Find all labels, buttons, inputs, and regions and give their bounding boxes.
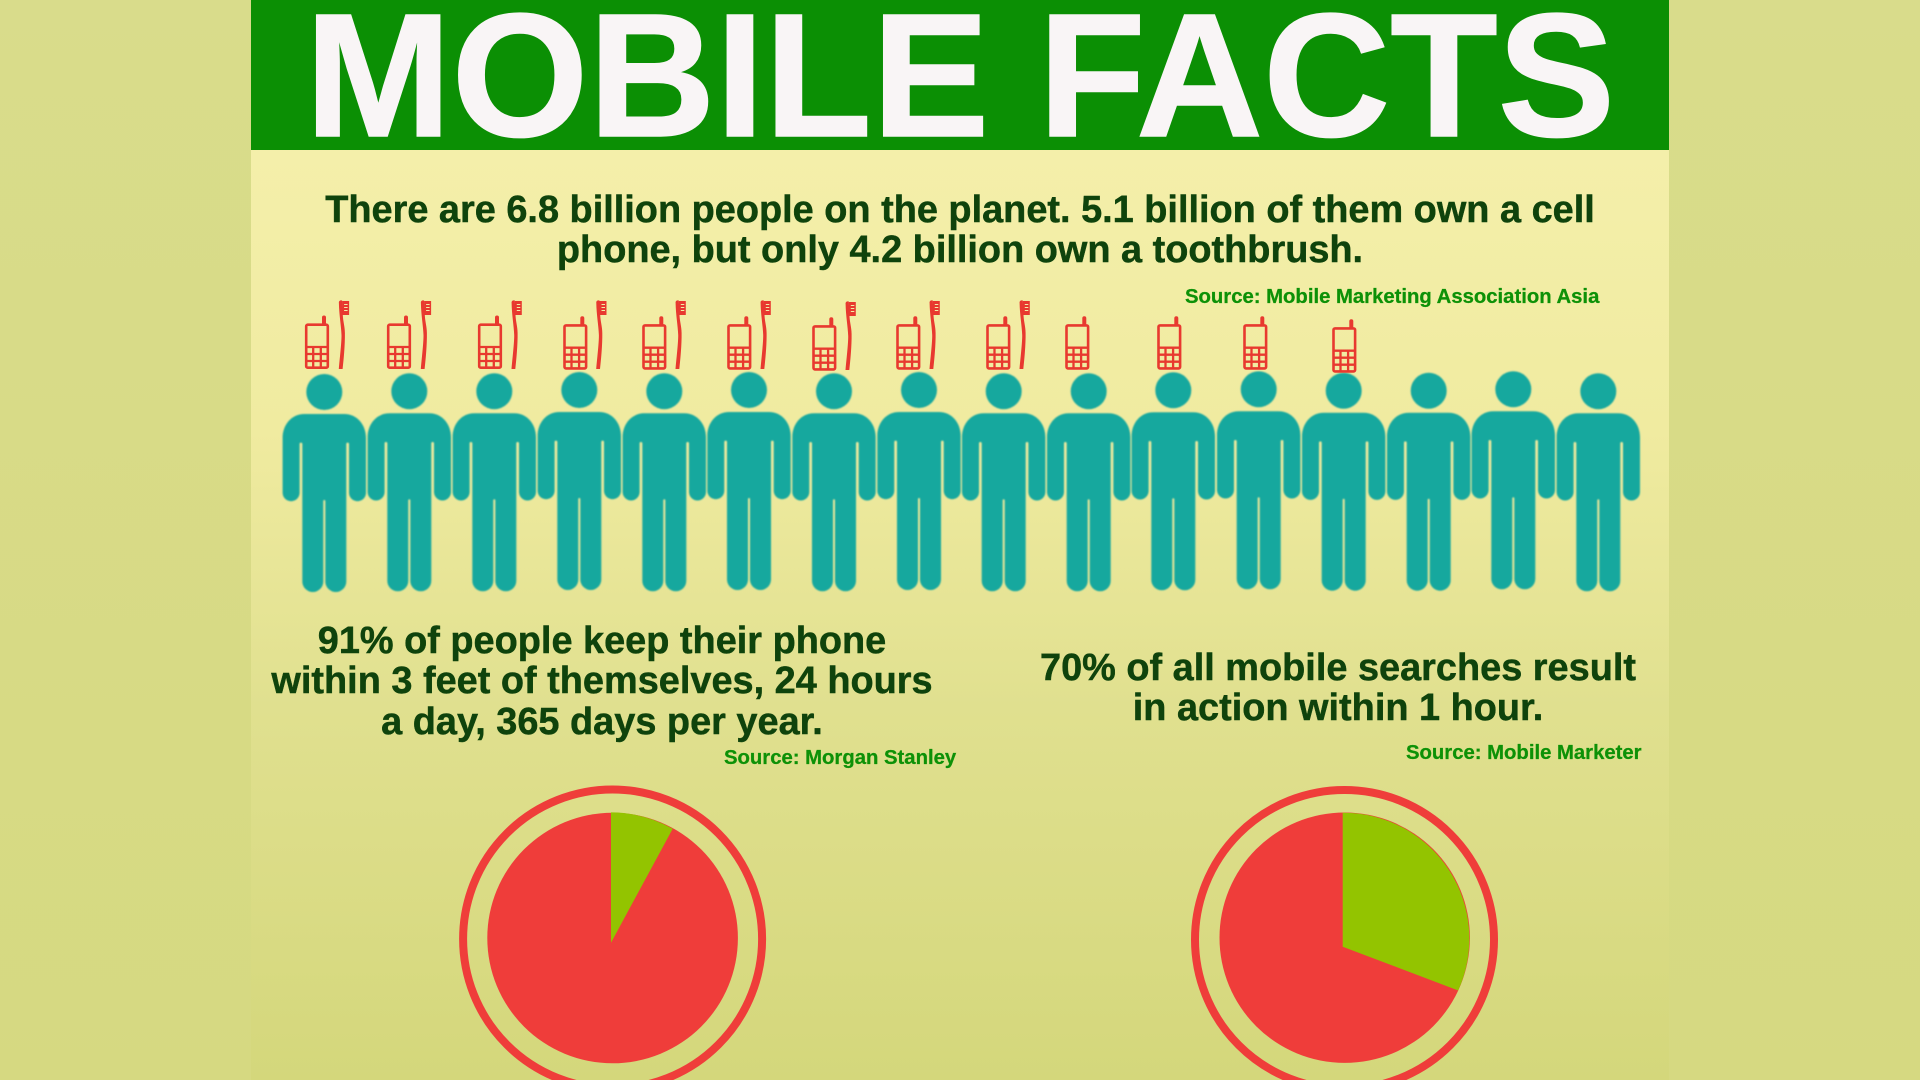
toothbrush 9	[1020, 300, 1030, 369]
phone 7	[813, 319, 835, 369]
person 1	[283, 374, 366, 592]
right fact text: in action within 1 hour.	[1133, 687, 1543, 729]
phone 1	[306, 318, 328, 368]
phone 2	[388, 318, 410, 368]
source: Mobile Marketer: Source: Mobile Marketer	[1406, 742, 1642, 764]
phone 4	[564, 318, 586, 368]
toothbrush 6	[760, 300, 771, 369]
left ring	[463, 790, 762, 1080]
person 16	[1557, 373, 1640, 591]
pictogram: toothbrushes	[339, 300, 1030, 370]
right ring	[1195, 790, 1494, 1080]
toothbrush 5	[676, 300, 686, 369]
title banner	[251, 0, 1669, 174]
phone 11	[1158, 318, 1180, 368]
left pie chart	[463, 790, 762, 1080]
person 12	[1217, 371, 1300, 589]
left fact text: within 3 feet of themselves, 24 hours	[270, 660, 933, 702]
person 9	[962, 373, 1045, 591]
central panel	[251, 150, 1669, 1080]
right pie red slice	[1220, 812, 1470, 1063]
toothbrush 1	[339, 300, 349, 369]
pictogram: cell phones	[306, 318, 1355, 371]
phone 9	[987, 318, 1009, 368]
right pie chart	[1195, 790, 1494, 1080]
person 8	[877, 372, 961, 590]
source: Morgan Stanley: Source: Morgan Stanley	[724, 747, 957, 769]
toothbrush 4	[596, 300, 606, 369]
person 3	[453, 373, 536, 591]
person 14	[1387, 373, 1470, 591]
toothbrush 3	[512, 300, 522, 369]
left fact text: a day, 365 days per year.	[381, 701, 823, 743]
toothbrush 2	[421, 300, 431, 369]
person 10	[1047, 373, 1130, 591]
toothbrush 7	[846, 301, 856, 370]
right fact text: 70% of all mobile searches result	[1040, 647, 1636, 689]
person 15	[1472, 371, 1555, 589]
person 5	[623, 373, 706, 591]
person 6	[707, 372, 791, 590]
left fact text: 91% of people keep their phone	[318, 620, 886, 662]
person 2	[368, 373, 451, 591]
person 4	[538, 372, 621, 590]
phone 8	[897, 318, 919, 368]
intro statement: There are 6.8 billion people on the planet. 5.1 billion of them own a cell	[325, 189, 1595, 231]
left pie red slice	[487, 813, 738, 1063]
right pie green slice	[1343, 813, 1469, 990]
source: Mobile Marketing Association Asia: Source: Mobile Marketing Association Asia	[1185, 286, 1600, 308]
left pie green slice	[611, 812, 673, 943]
phone 6	[728, 318, 750, 368]
phone 12	[1244, 318, 1266, 368]
phone 3	[479, 318, 501, 368]
toothbrush 8	[930, 300, 940, 369]
person 13	[1302, 373, 1385, 591]
person 11	[1132, 372, 1215, 590]
intro statement: phone, but only 4.2 billion own a toothbrush.	[557, 229, 1363, 271]
person 7	[792, 373, 876, 591]
phone 10	[1066, 318, 1088, 368]
pictogram: people row	[283, 371, 1640, 592]
phone 13	[1333, 321, 1355, 371]
phone 5	[643, 318, 665, 368]
